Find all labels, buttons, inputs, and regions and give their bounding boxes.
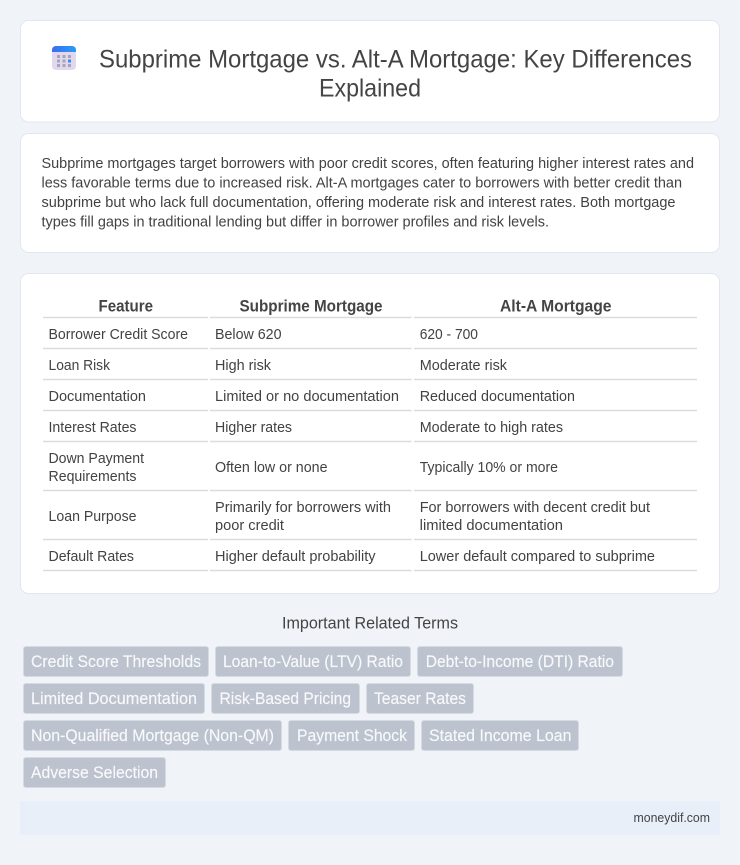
title: Subprime Mortgage vs. Alt-A Mortgage: Key Differences (99, 46, 692, 74)
tag: adverse selection: Adverse Selection (31, 764, 158, 782)
row: interest rates (48, 420, 563, 436)
tag: credit score thresholds (24, 646, 208, 676)
table header row (98, 298, 612, 316)
row: default rates (48, 549, 655, 565)
footer: moneydif.com (634, 811, 710, 825)
title (99, 46, 692, 102)
tag: limited documentation (24, 684, 204, 714)
tag: non-qualified mortgage (24, 720, 282, 750)
row: down payment requirements: Often low or none (215, 460, 328, 476)
row: borrower credit score: 620 - 700 (420, 327, 478, 343)
tag: payment shock (288, 720, 414, 750)
tag: non-qualified mortgage: Non-Qualified Mortgage (Non-QM) (31, 727, 274, 745)
icon: calendar (52, 46, 76, 70)
row: interest rates: Moderate to high rates (420, 420, 563, 436)
row: documentation (48, 389, 575, 405)
related term tags (24, 646, 622, 788)
panel: introduction text: less favorable terms due to increased risk. Alt-A mortgages cater to borrowers with better credit than (42, 176, 682, 192)
row: loan purpose: poor credit (215, 518, 284, 534)
table header row: Alt-A Mortgage (500, 298, 612, 316)
row: loan risk: High risk (215, 358, 272, 374)
row: loan risk (48, 358, 508, 374)
tag: risk-based pricing: Risk-Based Pricing (220, 690, 351, 708)
tag: payment shock: Payment Shock (297, 727, 408, 745)
row: documentation: Limited or no documentation (215, 389, 399, 405)
panel: header (20, 20, 720, 122)
tag: teaser rates: Teaser Rates (374, 690, 466, 708)
table header row: Subprime Mortgage (240, 298, 382, 316)
row: default rates: Higher default probability (215, 549, 376, 565)
tag: limited documentation: Limited Documentation (31, 690, 197, 708)
heading: important related terms: Important Related Terms (282, 614, 458, 632)
row: borrower credit score: Below 620 (215, 327, 282, 343)
row: default rates: Default Rates (48, 549, 134, 565)
row: down payment requirements: Requirements (48, 469, 136, 485)
title: Explained (319, 74, 421, 102)
row: down payment requirements: Down Payment (48, 451, 144, 467)
row: borrower credit score (48, 327, 478, 343)
table header row: Feature (98, 298, 153, 316)
tag: adverse selection (24, 758, 166, 788)
row: documentation: Documentation (48, 389, 146, 405)
row: borrower credit score: Borrower Credit Score (48, 327, 188, 343)
tag: stated income loan (422, 720, 578, 750)
panel: introduction text: types fill gaps in traditional lending but differ in borrower profiles and risk levels. (42, 214, 549, 230)
row: down payment requirements (48, 451, 558, 485)
tag: debt-to-income ratio: Debt-to-Income (DTI) Ratio (426, 653, 614, 671)
row: loan purpose (48, 500, 650, 534)
row: default rates: Lower default compared to subprime (420, 549, 655, 565)
row: loan risk: Loan Risk (48, 358, 111, 374)
panel: introduction text (20, 134, 720, 252)
tag: credit score thresholds: Credit Score Thresholds (31, 653, 201, 671)
panel: introduction text: Subprime mortgages target borrowers with poor credit scores, often featuring higher interest rates and (42, 156, 694, 172)
tag: stated income loan: Stated Income Loan (429, 727, 572, 745)
tag: teaser rates (366, 684, 474, 714)
row: loan purpose: For borrowers with decent credit but (420, 500, 650, 516)
tag: loan-to-value ratio: Loan-to-Value (LTV) Ratio (223, 653, 403, 671)
row: interest rates: Higher rates (215, 420, 292, 436)
row: documentation: Reduced documentation (420, 389, 575, 405)
panel: comparison table (20, 274, 720, 594)
row: loan risk: Moderate risk (420, 358, 508, 374)
tag: risk-based pricing (212, 684, 360, 714)
row: loan purpose: Primarily for borrowers with (215, 500, 391, 516)
tag: loan-to-value ratio (216, 646, 410, 676)
tag: debt-to-income ratio (418, 646, 622, 676)
row: interest rates: Interest Rates (48, 420, 136, 436)
row: down payment requirements: Typically 10% or more (420, 460, 558, 476)
row: loan purpose: Loan Purpose (48, 509, 136, 525)
footer (20, 801, 720, 835)
row: loan purpose: limited documentation (420, 518, 563, 534)
panel: introduction text: subprime but who lack full documentation, offering moderate risk and interest rates. Both mortgage (42, 195, 676, 211)
